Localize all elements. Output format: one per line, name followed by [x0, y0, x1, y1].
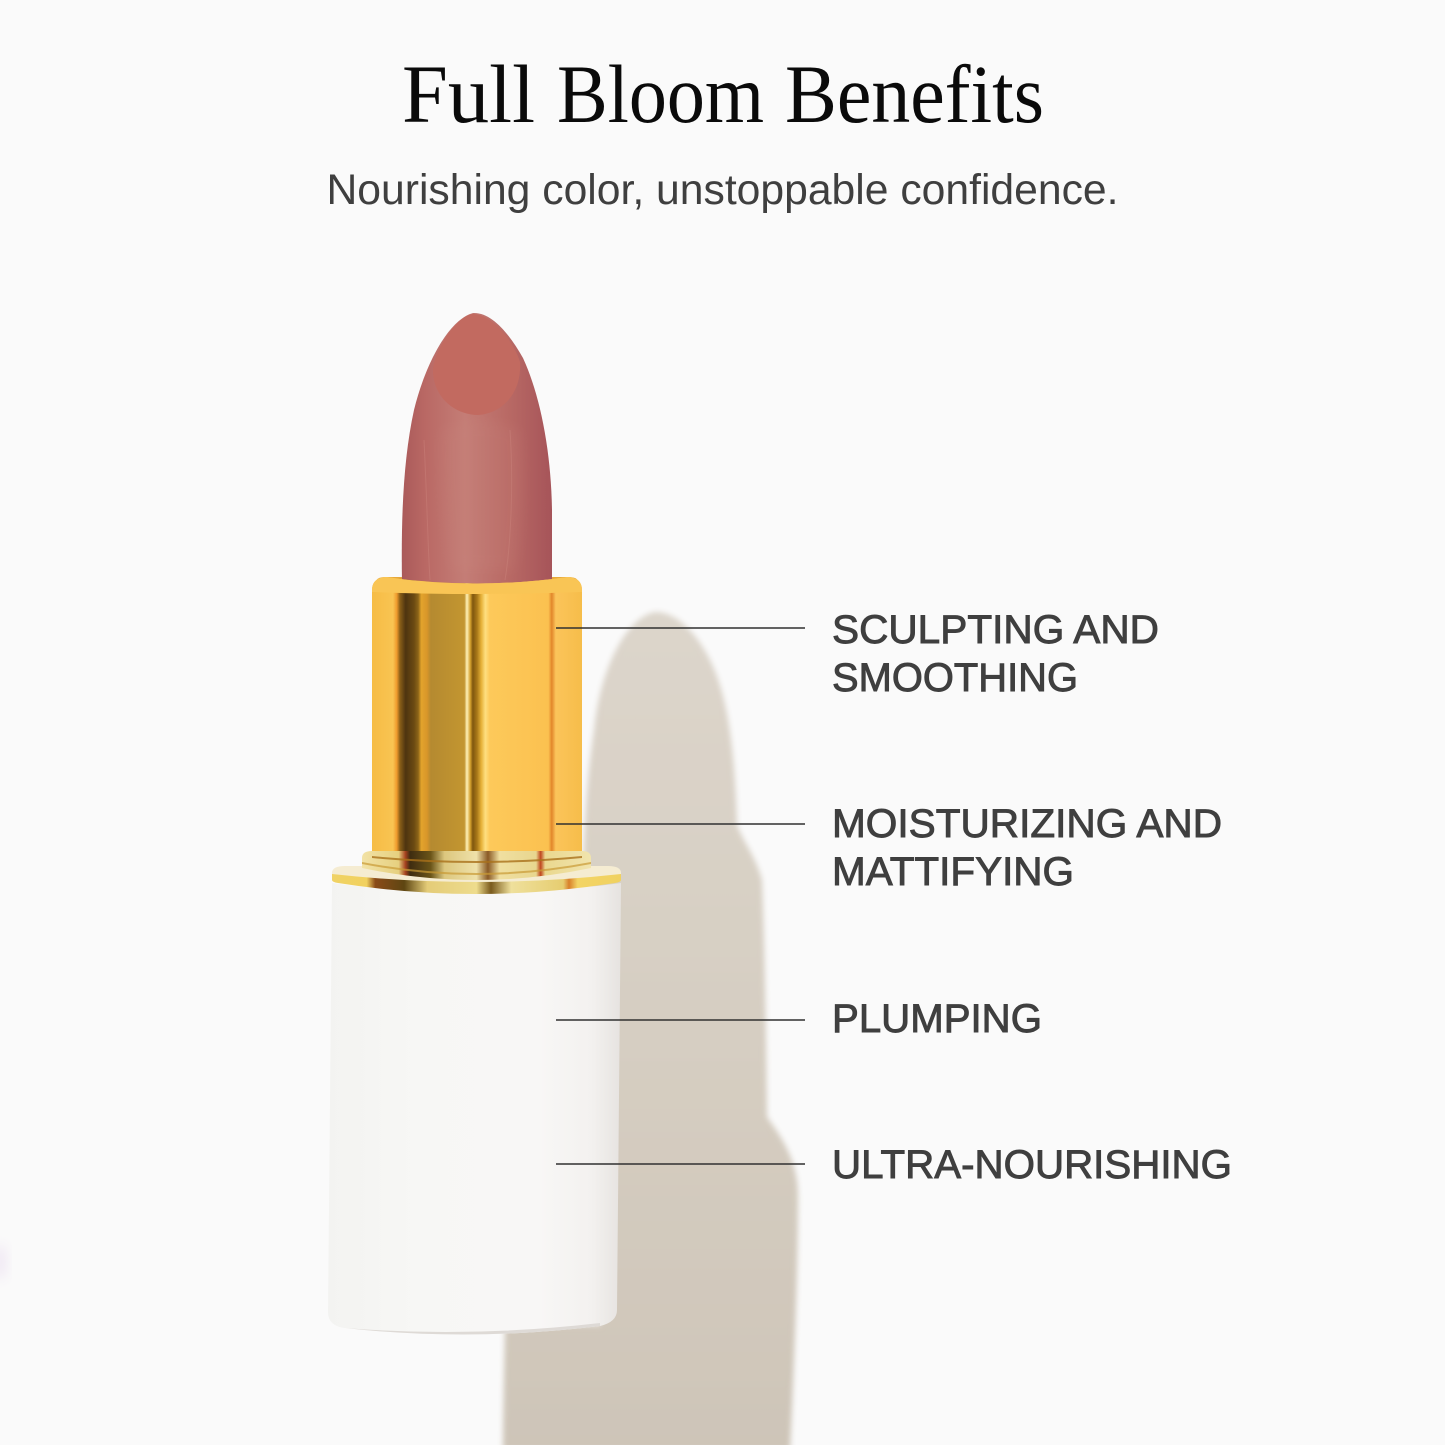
lipstick cast shadow [503, 612, 798, 1445]
subtitle: Nourishing color, unstoppable confidence. [326, 166, 1118, 214]
benefit: sculpting and smoothing: SMOOTHING [832, 656, 1078, 700]
collar back rim [376, 577, 578, 590]
benefit: ultra-nourishing: ULTRA-NOURISHING [832, 1143, 1232, 1187]
tube base lip [345, 1323, 600, 1335]
benefit: moisturizing and mattifying [556, 802, 1222, 894]
benefit: moisturizing and mattifying: MATTIFYING [832, 850, 1074, 894]
faint pigment mark [0, 1244, 6, 1280]
gold ring lower [332, 866, 621, 894]
benefit: moisturizing and mattifying: MOISTURIZING AND [832, 802, 1222, 846]
title: Benefits [785, 48, 1044, 140]
title: Full [402, 48, 535, 140]
benefit: sculpting and smoothing: SCULPTING AND [832, 608, 1159, 652]
benefit: plumping: PLUMPING [832, 997, 1042, 1041]
slanted tip facet [433, 314, 520, 415]
title: Bloom [557, 48, 764, 140]
benefit: sculpting and smoothing [556, 608, 1159, 700]
gold collar [372, 577, 582, 863]
lipstick bullet [402, 313, 552, 586]
white tube [328, 883, 621, 1335]
lipstick [328, 313, 621, 1335]
gold ring upper [362, 851, 591, 880]
